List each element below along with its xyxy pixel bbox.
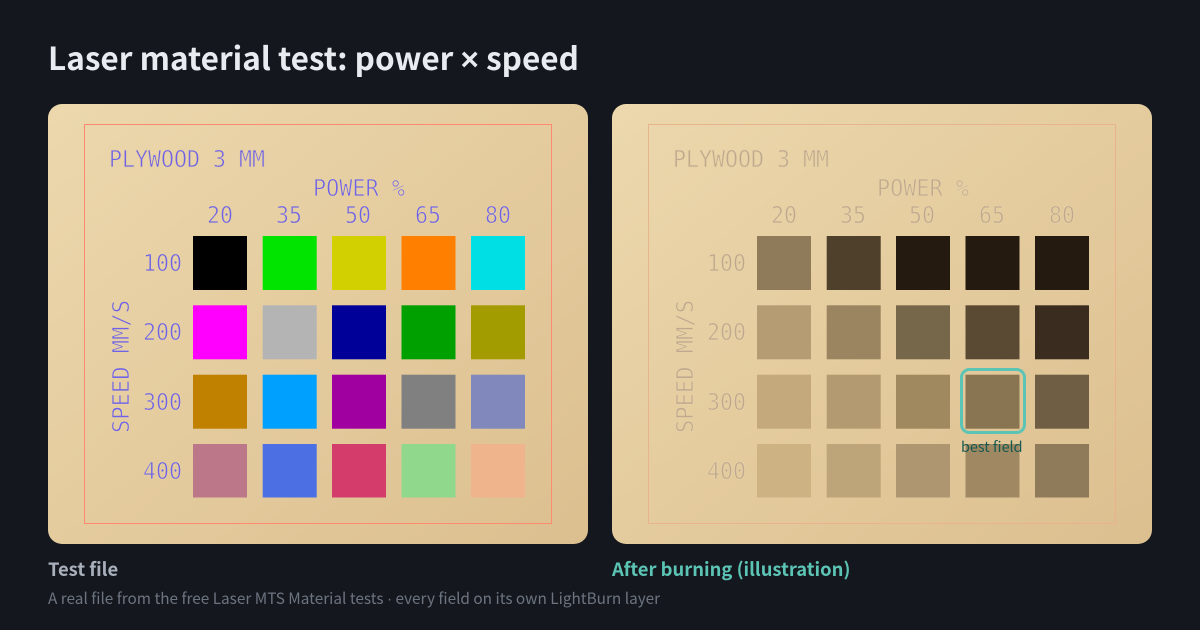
best field label: best field bbox=[961, 436, 1023, 457]
source note: A real file from the free Laser MTS Material tests · every field on its own LightBurn layer bbox=[48, 587, 660, 609]
faded labels: 400 bbox=[707, 457, 746, 485]
panel: after burning bbox=[612, 104, 1152, 544]
caption: test file: Test file bbox=[48, 556, 118, 582]
axis and material labels: 50 bbox=[345, 201, 371, 229]
faded labels: 35 bbox=[840, 201, 866, 229]
axis and material labels: 35 bbox=[276, 201, 302, 229]
axis and material labels: POWER % bbox=[313, 174, 405, 202]
axis and material labels: 20 bbox=[207, 201, 233, 229]
best field highlight bbox=[962, 370, 1024, 432]
burned field grid bbox=[757, 236, 1089, 498]
faded labels: 65 bbox=[979, 201, 1005, 229]
faded labels: 20 bbox=[771, 201, 797, 229]
axis and material labels: 80 bbox=[485, 201, 511, 229]
faded labels: 50 bbox=[909, 201, 935, 229]
axis and material labels: SPEED MM/S bbox=[107, 300, 135, 433]
axis and material labels: 300 bbox=[143, 388, 182, 416]
axis and material labels: 100 bbox=[143, 249, 182, 277]
axis and material labels bbox=[107, 145, 511, 485]
faded labels: 200 bbox=[707, 318, 746, 346]
cut border bbox=[648, 124, 1116, 524]
faded labels: PLYWOOD 3 MM bbox=[673, 145, 829, 173]
faded labels: 80 bbox=[1049, 201, 1075, 229]
title: Laser material test: power × speed bbox=[48, 34, 579, 80]
faded labels: 300 bbox=[707, 388, 746, 416]
faded labels: 100 bbox=[707, 249, 746, 277]
axis and material labels: 200 bbox=[143, 318, 182, 346]
cut border bbox=[84, 124, 552, 524]
panel: test file bbox=[48, 104, 588, 544]
axis and material labels: 400 bbox=[143, 457, 182, 485]
faded labels: POWER % bbox=[877, 174, 969, 202]
axis and material labels: PLYWOOD 3 MM bbox=[109, 145, 265, 173]
axis and material labels: 65 bbox=[415, 201, 441, 229]
faded labels: SPEED MM/S bbox=[671, 300, 699, 433]
colour layer grid bbox=[193, 236, 525, 498]
caption: after burning: After burning (illustration) bbox=[612, 556, 850, 582]
faded labels bbox=[671, 145, 1075, 485]
